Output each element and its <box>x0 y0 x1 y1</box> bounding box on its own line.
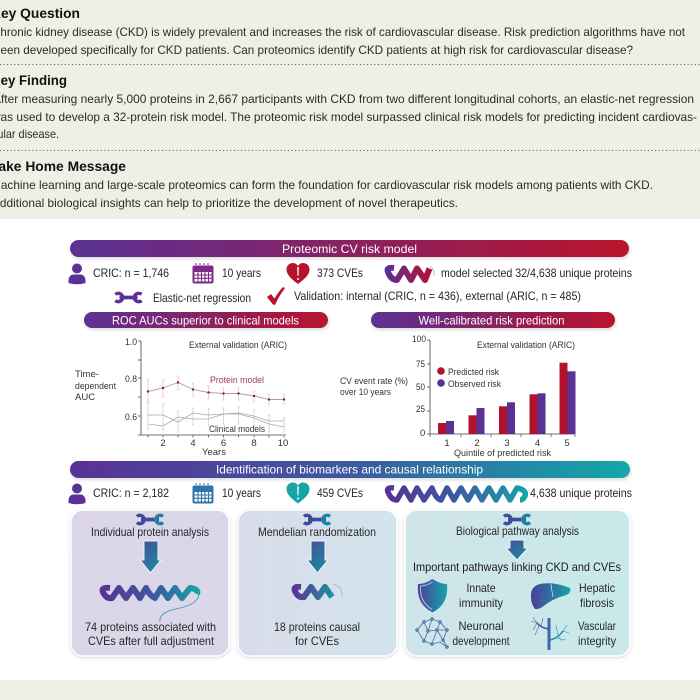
arrow: down <box>307 541 328 573</box>
icon: shield <box>418 579 447 612</box>
bar chart: calibration: 100 <box>412 334 426 345</box>
bar chart: calibration <box>340 334 576 459</box>
line chart: time-dependent AUC: Clinical models <box>209 424 265 435</box>
text block: key finding: was used to develop a 32-protein risk model. The proteomic risk model surpassed clinical risk models for predicting incident cardiovas- <box>0 110 697 124</box>
line chart: time-dependent AUC: AUC <box>75 392 95 403</box>
bar chart: calibration: 25 <box>416 404 425 415</box>
bar chart: calibration: CV event rate (%) <box>340 376 408 387</box>
icon: person <box>68 264 86 284</box>
text block: take home message: Additional biological insights can help to prioritize the development of novel therapeutics. <box>0 196 458 210</box>
text: 459 CVEs: 459 CVEs <box>317 486 363 500</box>
line chart: time-dependent AUC: Years <box>202 447 226 458</box>
bar chart: calibration: 5 <box>564 438 570 449</box>
panel: individual protein analysis <box>71 510 229 656</box>
text: method label: Mendelian randomization <box>258 525 376 539</box>
line chart: time-dependent AUC: Protein model <box>210 375 264 386</box>
icon: wrench <box>137 515 163 524</box>
icon: heart alert <box>286 263 310 284</box>
panel: mendelian randomization <box>238 510 397 656</box>
icon: protein helix <box>388 266 434 280</box>
line chart: time-dependent AUC <box>75 337 288 458</box>
bar chart: calibration: 4 <box>535 438 540 449</box>
heading bar: identification of biomarkers <box>70 461 630 478</box>
line chart: time-dependent AUC: dependent <box>75 381 116 392</box>
panel: summary band <box>0 0 700 219</box>
text block: key question: Chronic kidney disease (CKD) is widely prevalent and increases the risk of cardiovascular disease. Risk prediction algorithms have not <box>0 25 686 39</box>
bar chart: calibration: 1 <box>444 438 450 449</box>
text: neuronal development: development <box>452 634 510 648</box>
bar chart: calibration: Observed risk <box>448 379 501 390</box>
heading bar: proteomic CV risk model <box>70 240 629 257</box>
icon: protein helix <box>295 584 342 597</box>
text: method label: Biological pathway analysis <box>456 524 579 538</box>
text: result: for CVEs <box>295 634 339 648</box>
line chart: time-dependent AUC: 10 <box>278 438 288 449</box>
icon: protein helix with tail <box>103 588 199 622</box>
line chart: time-dependent AUC: External validation (ARIC) <box>189 340 287 351</box>
text: method label: Individual protein analysis <box>91 525 209 539</box>
text block: key finding <box>0 92 697 141</box>
text: result <box>85 620 216 648</box>
text block: key question: been developed specifically for CKD patients. Can proteomics identify CKD patients at high risk for cardiovascular disease? <box>0 43 633 57</box>
line chart: time-dependent AUC: Time- <box>75 369 99 380</box>
text: result <box>274 620 360 648</box>
text: pathways heading: Important pathways linking CKD and CVEs <box>413 560 621 574</box>
bar chart: calibration: 75 <box>416 359 425 370</box>
text: result: 74 proteins associated with <box>85 620 216 634</box>
heading pill: well-calibrated <box>371 312 615 328</box>
text: CRIC n 2182: CRIC: n = 2,182 <box>93 486 169 500</box>
icon: liver <box>531 583 570 609</box>
text: innate immunity: immunity <box>459 596 503 610</box>
icon: wrench <box>504 515 530 524</box>
bar chart: calibration: over 10 years <box>340 387 391 398</box>
icon: calendar <box>192 263 214 284</box>
arrow: down <box>506 540 528 560</box>
icon: person <box>68 484 86 504</box>
heading pill: ROC AUCs: ROC AUCs superior to clinical models <box>112 314 299 328</box>
text: innate immunity <box>459 581 503 610</box>
text: hepatic fibrosis <box>579 581 615 610</box>
bar chart: calibration: External validation (ARIC) <box>477 340 575 351</box>
heading pill: well-calibrated: Well-calibrated risk prediction <box>418 314 564 328</box>
text: model selected: model selected 32/4,638 unique proteins <box>441 266 632 280</box>
line chart: time-dependent AUC: 8 <box>251 438 257 449</box>
heading bar: identification of biomarkers: Identification of biomarkers and causal relationship <box>216 462 483 476</box>
text block: take home message: Machine learning and large-scale proteomics can form the foundation for cardiovascular risk models among patients with CKD. <box>0 178 653 192</box>
icon: neural network brain <box>416 618 448 648</box>
text: neuronal development <box>452 619 510 648</box>
icon: wrench <box>116 293 142 302</box>
line chart: time-dependent AUC: 0.8 <box>125 374 137 385</box>
line chart: time-dependent AUC: 2 <box>160 438 166 449</box>
text: hepatic fibrosis: Hepatic <box>579 581 615 595</box>
text block: key question <box>0 25 686 57</box>
bar chart: calibration: 0 <box>420 428 425 439</box>
text: vascular integrity <box>578 619 616 648</box>
icon: wrench <box>304 515 330 524</box>
text: hepatic fibrosis: fibrosis <box>580 596 614 610</box>
bar chart: calibration: 3 <box>504 438 510 449</box>
icon: blood vessels <box>531 617 569 650</box>
bar chart: calibration: 50 <box>416 382 425 393</box>
protein model line <box>146 376 286 404</box>
text: 10 years: 10 years <box>222 486 261 500</box>
text block: key finding: After measuring nearly 5,000 proteins in 2,667 participants with CKD from two different longitudinal cohorts, an elastic-net regression <box>0 92 694 106</box>
text: unique proteins: 4,638 unique proteins <box>530 486 632 500</box>
bar chart: calibration: Predicted risk <box>448 367 499 378</box>
text: result: 18 proteins causal <box>274 620 360 634</box>
line chart: time-dependent AUC: 4 <box>190 438 196 449</box>
arrow: down <box>140 541 161 573</box>
text: validation: Validation: internal (CRIC, n = 436), external (ARIC, n = 485) <box>294 289 581 303</box>
text: 373 CVEs: 373 CVEs <box>317 266 363 280</box>
text block: take home message <box>0 178 653 210</box>
bar chart: calibration: 2 <box>474 438 480 449</box>
text: vascular integrity: integrity <box>578 634 616 648</box>
text: neuronal development: Neuronal <box>458 619 504 633</box>
heading bar: proteomic CV risk model: Proteomic CV risk model <box>282 242 417 256</box>
bar chart: calibration: Quintile of predicted risk <box>454 448 551 459</box>
line chart: time-dependent AUC: 6 <box>221 438 226 449</box>
text: vascular integrity: Vascular <box>578 619 616 633</box>
bottom band <box>0 680 700 700</box>
icon: heart alert <box>286 482 310 504</box>
text: CRIC n 1746: CRIC: n = 1,746 <box>93 266 169 280</box>
text: 10 years: 10 years <box>222 266 261 280</box>
line chart: time-dependent AUC: 0.6 <box>125 412 137 423</box>
clinical model lines <box>146 403 286 435</box>
text: innate immunity: Innate <box>466 581 496 595</box>
icon: long protein helix <box>388 488 525 500</box>
line chart: time-dependent AUC: 1.0 <box>125 337 137 348</box>
icon: check mark <box>267 287 285 305</box>
panel: biological pathway analysis <box>405 510 630 656</box>
text: result: CVEs after full adjustment <box>88 634 215 648</box>
text: elastic-net regression: Elastic-net regression <box>153 291 251 305</box>
icon: calendar <box>192 483 214 504</box>
